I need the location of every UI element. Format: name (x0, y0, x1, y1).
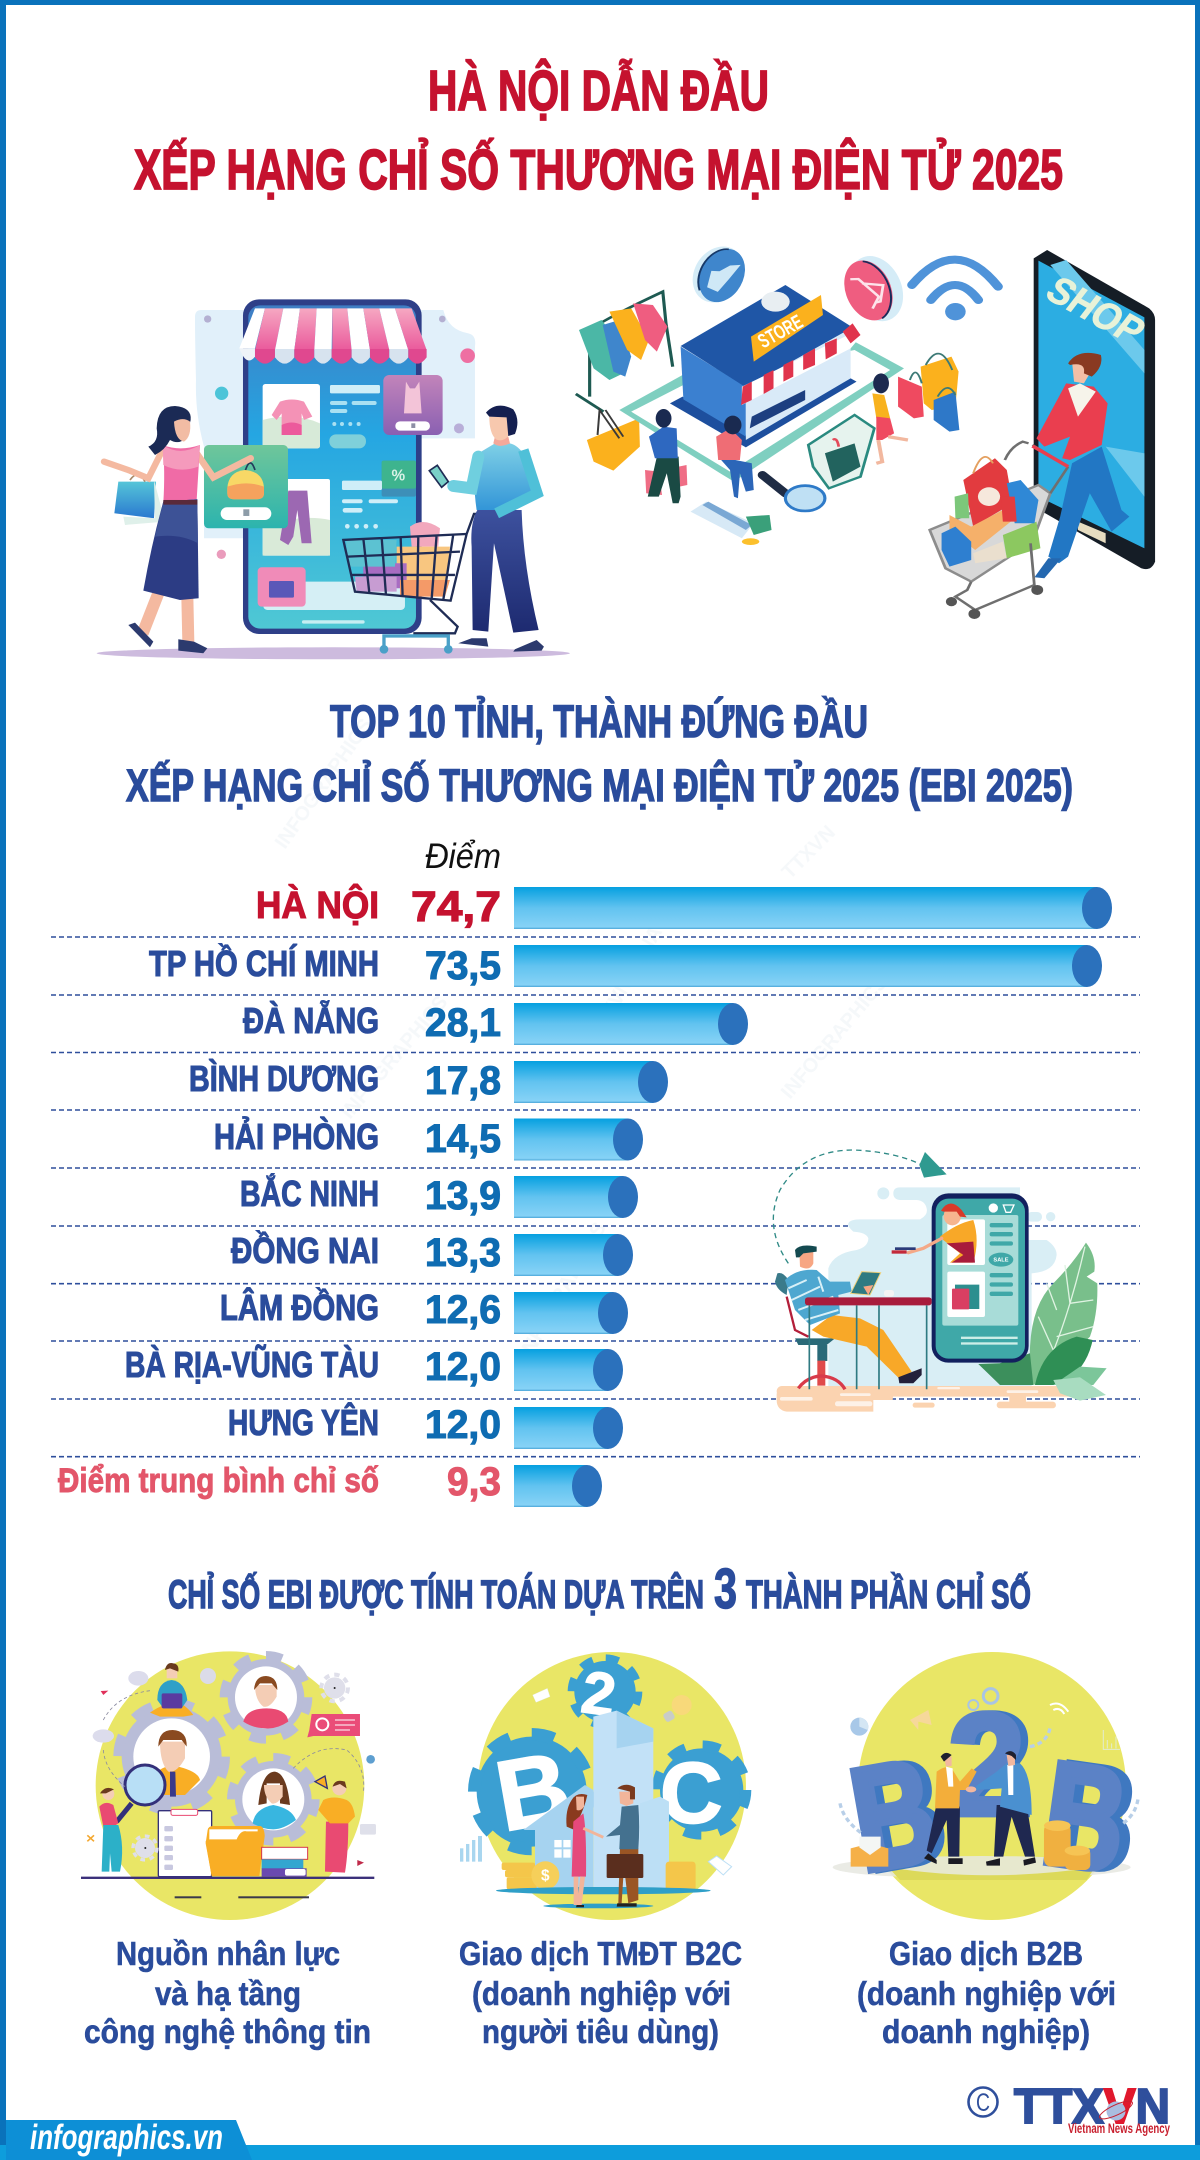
row: Đồng Nai: ĐỒNG NAI (231, 1229, 379, 1271)
businessman left (924, 1753, 977, 1864)
section heading: three components: CHỈ SỐ EBI ĐƯỢC TÍNH TOÁN DỰA TRÊN (168, 1571, 704, 1617)
person with laptop (150, 1705, 193, 1717)
awning (239, 308, 427, 364)
caption: (doanh nghiệp với (857, 1975, 1116, 2012)
floating icons (533, 1688, 550, 1702)
gear B (477, 1737, 587, 1847)
illustration: isometric online store and shopper (576, 241, 1155, 619)
businessman right (976, 1751, 1036, 1866)
bar chart (58, 882, 1112, 1507)
caption: (doanh nghiệp với (472, 1975, 731, 2012)
row: Bình Dương: BÌNH DƯƠNG (189, 1058, 379, 1099)
logo: TTXVN: C (976, 2089, 990, 2117)
phone storefront: SALE (993, 1258, 1009, 1264)
row: Bình Dương (189, 1058, 668, 1103)
caption: Giao dịch TMĐT B2C (459, 1935, 742, 1972)
footer tab: infographics.vn: infographics.vn (30, 2118, 223, 2157)
caption: doanh nghiệp) (882, 2013, 1090, 2050)
icon: B2C gears and handshake (460, 1652, 746, 1920)
row: Đồng Nai (231, 1229, 633, 1276)
left B: B (847, 1727, 957, 1903)
man (576, 1785, 643, 1907)
title: HÀ NỘI DẪN ĐẦU (428, 58, 769, 123)
icon: B2B letters and handshake: B (1034, 1731, 1136, 1904)
floating icons (850, 1718, 868, 1736)
dashed row dividers (51, 937, 1140, 1457)
row: Hà Nội: HÀ NỘI (256, 882, 379, 927)
component 2: B2C transactions (459, 1652, 746, 2050)
caption: và hạ tầng (155, 1975, 301, 2012)
row: Hưng Yên: 12,0 (425, 1403, 501, 1447)
row: TP Hồ Chí Minh: 73,5 (425, 944, 501, 988)
plant (978, 1243, 1107, 1401)
row: Hải Phòng: HẢI PHÒNG (214, 1115, 379, 1157)
product card: tank top (383, 375, 443, 435)
desk (805, 1297, 932, 1389)
footer band (0, 2145, 1200, 2160)
phone storefront (892, 1193, 1029, 1363)
row: Bà Rịa-Vũng Tàu: 12,0 (425, 1345, 501, 1389)
caption (459, 1935, 742, 2050)
row: Lâm Đồng: 12,6 (425, 1288, 501, 1332)
caption: người tiêu dùng) (482, 2013, 719, 2050)
logo: TTXVN: TTXVN (1014, 2080, 1170, 2134)
caption: Giao dịch B2B (889, 1935, 1083, 1972)
caption (857, 1935, 1116, 2050)
row: Hà Nội (256, 882, 1112, 931)
section heading: three components (168, 1557, 1031, 1621)
component 1: human resources and IT infrastructure (81, 1651, 376, 2050)
watermarks (271, 715, 892, 1362)
woman (104, 406, 251, 653)
dashed flight path (773, 1150, 920, 1263)
floor line (81, 1877, 374, 1879)
section heading: top 10 (126, 696, 1073, 811)
icon: B2B letters and handshake (833, 1652, 1147, 1920)
platform (619, 342, 904, 482)
folder (206, 1826, 265, 1876)
seller in phone (940, 1220, 977, 1263)
seated customer (716, 416, 754, 498)
icon: B2C gears and handshake: C (660, 1746, 723, 1842)
pale cloud background (828, 1187, 1057, 1387)
big phone: SHOP (1038, 268, 1154, 352)
icon: B2C gears and handshake: $ (541, 1868, 550, 1885)
magnifier (762, 475, 825, 511)
right B: B (1043, 1731, 1147, 1905)
big phone (1034, 250, 1155, 569)
row: Lâm Đồng: LÂM ĐỒNG (220, 1286, 379, 1328)
row: Bình Dương: 17,8 (425, 1059, 501, 1103)
row: Đà Nẵng: ĐÀ NẴNG (243, 1000, 379, 1041)
globe coin (684, 241, 753, 308)
component 3: B2B transactions (833, 1652, 1147, 2050)
caption: Nguồn nhân lực (116, 1935, 340, 1972)
icon: B2B letters and handshake: B (840, 1728, 948, 1903)
lines lower (342, 481, 398, 529)
awning stripes (742, 330, 861, 405)
customer with trolley (872, 373, 908, 463)
cart coin (836, 251, 912, 328)
illustration: couple shopping at a phone storefront (97, 299, 570, 659)
dots (204, 315, 475, 559)
man at desk (775, 1246, 922, 1389)
row: Bắc Ninh (240, 1172, 638, 1218)
house (523, 1785, 593, 1890)
woman (566, 1794, 603, 1905)
percent tag: % (391, 468, 405, 485)
row: Bà Rịa-Vũng Tàu: BÀ RỊA-VŨNG TÀU (125, 1343, 379, 1385)
gear C (660, 1748, 743, 1832)
caption: công nghệ thông tin (84, 2013, 371, 2050)
watermarks: INFOGRAPHICS (271, 715, 377, 853)
row: Hải Phòng (214, 1115, 643, 1161)
section heading: three components: 3 (714, 1557, 737, 1621)
row: Hưng Yên: HƯNG YÊN (228, 1401, 379, 1443)
camera on roof (761, 292, 790, 312)
row: Bắc Ninh: 13,9 (425, 1174, 501, 1218)
section heading: three components: THÀNH PHẦN CHỈ SỐ (746, 1571, 1031, 1617)
row: Bắc Ninh: BẮC NINH (240, 1172, 379, 1214)
credit card and cash (690, 502, 772, 545)
illustration: man at desk buying from phone (773, 1150, 1107, 1412)
product card: tee (263, 384, 320, 448)
floor (777, 1386, 1077, 1412)
paper plane (919, 1152, 947, 1178)
row: Đồng Nai: 13,3 (425, 1231, 501, 1275)
clothes rack (576, 292, 673, 412)
caption (84, 1935, 371, 2050)
ground shadow (97, 647, 570, 659)
store (670, 285, 861, 447)
gear 2 (574, 1661, 636, 1722)
row: Đà Nẵng (243, 1000, 748, 1045)
row: average score: Điểm trung bình chỉ số (58, 1462, 379, 1500)
icon: B2C gears and handshake: B (488, 1730, 578, 1853)
man (429, 406, 544, 652)
wifi icon (912, 260, 998, 320)
floating details (307, 1714, 360, 1737)
store: STORE (753, 312, 809, 352)
row: Hải Phòng: 14,5 (425, 1117, 501, 1161)
woman pushing cart (1034, 353, 1129, 578)
green card with handbag (204, 445, 288, 528)
icon: B2B letters and handshake: 2 (947, 1683, 1026, 1847)
big 2: 2 (952, 1683, 1033, 1847)
coins (1044, 1820, 1090, 1870)
pale background blob (195, 310, 475, 538)
row: average score: 9,3 (447, 1460, 501, 1504)
row: average score (58, 1460, 602, 1507)
books (262, 1847, 308, 1859)
coins (502, 1862, 696, 1891)
envelope (851, 1837, 888, 1867)
column header: points: Điểm (425, 837, 501, 876)
watermarks: TTXVN (778, 822, 840, 884)
row: Bà Rịa-Vũng Tàu (125, 1343, 623, 1391)
teal trolley (808, 415, 874, 488)
customer with bags (645, 409, 687, 503)
basket (587, 410, 640, 471)
phone (243, 299, 422, 634)
bottom panel and bag card (258, 567, 405, 624)
row: Đà Nẵng: 28,1 (425, 1001, 501, 1045)
percent tag (382, 461, 416, 497)
product info lines (329, 385, 380, 448)
store sign (751, 295, 823, 362)
watermarks: INFOGRAPHICS (515, 1219, 611, 1362)
watermarks: TTXVN - VNA (585, 923, 667, 1042)
buildings (593, 1711, 653, 1890)
watermarks: INFOGRAPHICS (337, 992, 452, 1123)
row: Hưng Yên (228, 1401, 623, 1449)
shopping bags (898, 354, 959, 432)
section heading: top 10: TOP 10 TỈNH, THÀNH ĐỨNG ĐẦU (330, 696, 868, 747)
row: Lâm Đồng (220, 1286, 628, 1334)
watermarks: INFOGRAPHICS (777, 972, 892, 1103)
product card: trousers (263, 479, 330, 556)
icon: B2C gears and handshake: 2 (578, 1658, 620, 1729)
magnifier and woman (125, 1765, 165, 1805)
clipboard (158, 1811, 212, 1877)
row: TP Hồ Chí Minh (149, 942, 1102, 988)
row: TP Hồ Chí Minh: TP HỒ CHÍ MINH (149, 942, 379, 984)
full shopping cart (930, 442, 1068, 619)
title (134, 58, 1063, 202)
shopping cart (343, 514, 482, 654)
ground (496, 1887, 711, 1894)
man with megaphone (325, 1822, 348, 1873)
row: Hà Nội: 74,7 (411, 883, 501, 931)
icon: people and gears (81, 1651, 376, 1920)
